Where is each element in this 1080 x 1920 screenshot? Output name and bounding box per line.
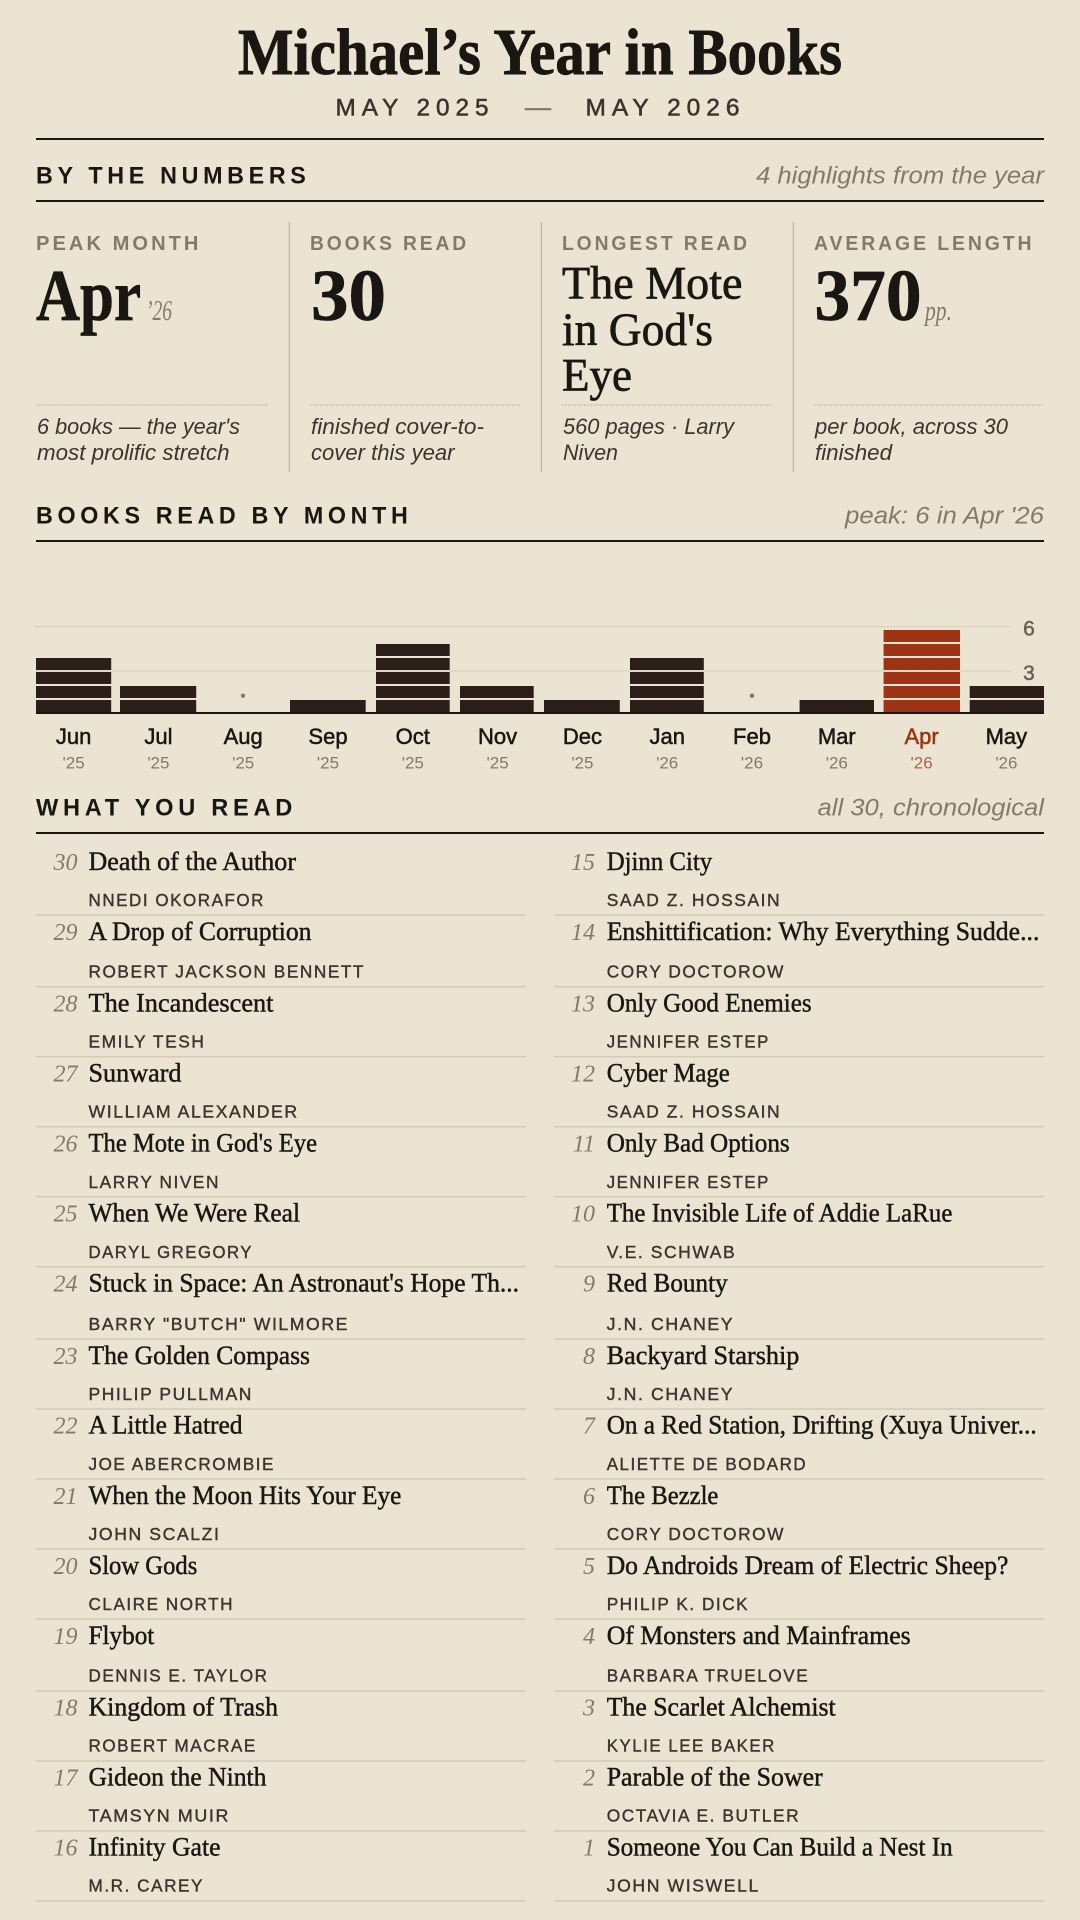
book 15: 15	[571, 850, 595, 876]
panel: longest read: The Mote	[562, 257, 742, 309]
panel: longest read	[562, 232, 772, 465]
book 13: JENNIFER ESTEP	[607, 1032, 770, 1052]
panel: longest read: Eye	[562, 350, 632, 402]
book 26: The Mote in God's Eye	[88, 1129, 317, 1158]
panel: longest read: 560 pages · Larry	[563, 414, 736, 439]
book 26: LARRY NIVEN	[88, 1172, 220, 1192]
book 25: DARYL GREGORY	[88, 1242, 253, 1262]
book 14: Enshittification: Why Everything Sudde...	[607, 917, 1039, 946]
subtitle: date range: —	[525, 95, 552, 122]
book 17: 17	[54, 1766, 78, 1792]
section heading: books read by month: BOOKS READ BY MONTH	[36, 502, 412, 529]
bar chart: books by month: Mar	[818, 724, 856, 749]
bar chart: books by month: Jul	[144, 724, 172, 749]
book 11: JENNIFER ESTEP	[607, 1172, 770, 1192]
book 27: 27	[54, 1062, 78, 1088]
title: Michael’s Year in Books	[238, 16, 842, 89]
panel: peak month: most prolific stretch	[37, 440, 230, 465]
panel: peak month: ’26	[146, 296, 172, 327]
book 2: OCTAVIA E. BUTLER	[607, 1806, 800, 1826]
section heading: what you read	[36, 795, 1045, 822]
book 24: BARRY "BUTCH" WILMORE	[88, 1314, 349, 1334]
book 19: 19	[54, 1624, 78, 1650]
book 29: ROBERT JACKSON BENNETT	[88, 962, 365, 982]
book 6: The Bezzle	[607, 1481, 718, 1510]
panel: average length: pp.	[923, 296, 952, 327]
book 7: 7	[583, 1413, 596, 1439]
book 28: EMILY TESH	[88, 1032, 206, 1052]
book 6	[554, 1481, 1044, 1550]
book 2	[554, 1763, 1044, 1832]
panel: books read: cover this year	[311, 440, 456, 465]
book 28: The Incandescent	[88, 989, 274, 1018]
subtitle: date range	[336, 95, 746, 122]
book 2: 2	[583, 1766, 595, 1792]
section heading: books read by month	[36, 502, 1045, 529]
book 16: 16	[54, 1836, 78, 1862]
book 4	[554, 1621, 1044, 1692]
book 12: Cyber Mage	[607, 1059, 730, 1088]
book 5	[554, 1551, 1044, 1620]
bar chart: books by month: May	[986, 724, 1027, 749]
book 26: 26	[54, 1132, 78, 1158]
book 3: KYLIE LEE BAKER	[607, 1736, 776, 1756]
book 20: CLAIRE NORTH	[88, 1594, 234, 1614]
book 27: WILLIAM ALEXANDER	[88, 1102, 299, 1122]
book 14: CORY DOCTOROW	[607, 962, 785, 982]
bar chart: books by month: '26	[656, 753, 678, 772]
book 8: J.N. CHANEY	[607, 1384, 734, 1404]
book 26	[36, 1129, 526, 1198]
book 12	[554, 1059, 1044, 1128]
book 5: PHILIP K. DICK	[607, 1594, 749, 1614]
book 29	[36, 917, 526, 988]
book 25: When We Were Real	[88, 1199, 300, 1228]
panel: longest read: in God's	[562, 304, 713, 356]
book 27: Sunward	[88, 1059, 182, 1088]
book 14	[554, 917, 1044, 988]
book 22: A Little Hatred	[88, 1410, 242, 1439]
bar chart: books by month: '25	[571, 753, 593, 772]
bar chart: books by month: '25	[487, 753, 509, 772]
book 16: Infinity Gate	[88, 1833, 220, 1862]
bar chart: books by month: 6	[1023, 617, 1035, 640]
book 24	[36, 1269, 526, 1340]
book 17: TAMSYN MUIR	[88, 1806, 230, 1826]
book 7: ALIETTE DE BODARD	[607, 1454, 807, 1474]
book 17	[36, 1763, 526, 1832]
book 19: DENNIS E. TAYLOR	[88, 1666, 268, 1686]
book 25: 25	[54, 1202, 78, 1228]
book 30: Death of the Author	[88, 847, 296, 876]
section heading: what you read: all 30, chronological	[818, 795, 1045, 822]
panel: average length: per book, across 30	[814, 414, 1009, 439]
book 14: 14	[571, 920, 595, 946]
panel: peak month: Apr	[36, 255, 141, 336]
book 16: M.R. CAREY	[88, 1876, 204, 1896]
bar chart: books by month: '25	[232, 753, 254, 772]
book 28: 28	[54, 992, 78, 1018]
panel: average length: 370	[814, 255, 922, 336]
book 7	[554, 1410, 1044, 1480]
bar chart: books by month: Aug	[224, 724, 263, 749]
bar chart: books by month: '25	[402, 753, 424, 772]
book list: left column	[36, 847, 526, 1902]
panel: books read	[310, 232, 520, 465]
bar chart: books by month: '26	[741, 753, 763, 772]
book 11: 11	[573, 1132, 595, 1158]
book 20: 20	[54, 1554, 78, 1580]
book 29: 29	[54, 920, 78, 946]
panel: longest read: Niven	[563, 440, 618, 465]
book 1: 1	[583, 1836, 595, 1862]
book 18: Kingdom of Trash	[88, 1693, 278, 1722]
book 13: 13	[571, 992, 595, 1018]
book 12: 12	[571, 1062, 595, 1088]
book 30: 30	[52, 850, 78, 876]
book 5: Do Androids Dream of Electric Sheep?	[607, 1551, 1008, 1580]
panel: average length	[814, 232, 1044, 465]
panel: books read: 30	[311, 255, 386, 336]
panel: average length: AVERAGE LENGTH	[814, 232, 1034, 255]
book 15: Djinn City	[607, 847, 712, 876]
section heading: books read by month: peak: 6 in Apr '26	[844, 502, 1045, 529]
book 13	[554, 989, 1044, 1058]
bar chart: books by month: '25	[317, 753, 339, 772]
book 28	[36, 989, 526, 1058]
book 1	[554, 1833, 1044, 1902]
book 18	[36, 1693, 526, 1762]
book 11	[554, 1129, 1044, 1198]
bar chart: books by month: Jan	[649, 724, 685, 749]
book 3	[554, 1693, 1044, 1762]
bar chart: books by month: '26	[995, 753, 1017, 772]
book 15	[554, 847, 1044, 916]
book 2: Parable of the Sower	[607, 1763, 823, 1792]
book 8	[554, 1341, 1044, 1410]
book 4: 4	[583, 1624, 595, 1650]
book 24: Stuck in Space: An Astronaut's Hope Th...	[88, 1269, 519, 1298]
bar chart: books by month: Sep	[308, 724, 348, 749]
book 9: J.N. CHANEY	[607, 1314, 734, 1334]
book 27	[36, 1059, 526, 1128]
book 15: SAAD Z. HOSSAIN	[607, 890, 781, 910]
subtitle: date range: MAY 2026	[586, 95, 746, 122]
book 30: NNEDI OKORAFOR	[88, 890, 265, 910]
panel: peak month: PEAK MONTH	[36, 232, 202, 255]
panel: books read: finished cover-to-	[311, 414, 484, 439]
book 3: The Scarlet Alchemist	[607, 1693, 836, 1722]
book 23: PHILIP PULLMAN	[88, 1384, 253, 1404]
book 22: JOE ABERCROMBIE	[88, 1454, 275, 1474]
subtitle: date range: MAY 2025	[336, 95, 494, 122]
book 18: ROBERT MACRAE	[88, 1736, 257, 1756]
book 7: On a Red Station, Drifting (Xuya Univer...	[607, 1410, 1037, 1439]
book 4: Of Monsters and Mainframes	[607, 1621, 911, 1650]
book 30	[36, 847, 526, 916]
book 19	[36, 1621, 526, 1692]
book 16	[36, 1833, 526, 1902]
book 9: 9	[583, 1272, 595, 1298]
panel: peak month	[36, 232, 268, 465]
book 1: Someone You Can Build a Nest In	[607, 1833, 953, 1862]
bar chart: books by month: Jun	[56, 724, 91, 749]
book 21	[36, 1481, 526, 1550]
book 9: Red Bounty	[607, 1269, 728, 1298]
book 8: 8	[583, 1344, 595, 1370]
panel: books read: BOOKS READ	[310, 232, 469, 255]
book 6: 6	[583, 1484, 595, 1510]
bar chart: books by month: Nov	[478, 724, 517, 749]
book 23: The Golden Compass	[88, 1341, 310, 1370]
section heading: what you read: WHAT YOU READ	[36, 795, 297, 822]
bar chart: books by month: Dec	[563, 724, 602, 749]
book 22: 22	[54, 1413, 78, 1439]
book 3: 3	[582, 1696, 595, 1722]
book 24: 24	[54, 1272, 78, 1298]
book 18: 18	[54, 1696, 78, 1722]
bar chart: books by month: '25	[63, 753, 85, 772]
book 9	[554, 1269, 1044, 1340]
section heading: by the numbers	[36, 163, 1045, 190]
book 12: SAAD Z. HOSSAIN	[607, 1102, 781, 1122]
book 23	[36, 1341, 526, 1410]
book 22	[36, 1410, 526, 1480]
book 10: V.E. SCHWAB	[607, 1242, 736, 1262]
section heading: by the numbers: 4 highlights from the year	[756, 163, 1045, 190]
panel: average length: finished	[815, 440, 893, 465]
bar chart: books by month	[36, 617, 1044, 772]
book 10: The Invisible Life of Addie LaRue	[607, 1199, 952, 1228]
book 4: BARBARA TRUELOVE	[607, 1666, 809, 1686]
book 17: Gideon the Ninth	[88, 1763, 266, 1792]
book 21: When the Moon Hits Your Eye	[88, 1481, 401, 1510]
book 25	[36, 1199, 526, 1268]
bar chart: books by month: '26	[826, 753, 848, 772]
bar chart: books by month: '25	[147, 753, 169, 772]
book 20	[36, 1551, 526, 1620]
book 20: Slow Gods	[88, 1551, 197, 1580]
book 21: JOHN SCALZI	[88, 1524, 220, 1544]
book 1: JOHN WISWELL	[607, 1876, 760, 1896]
book 8: Backyard Starship	[607, 1341, 799, 1370]
book 23: 23	[54, 1344, 78, 1370]
book 6: CORY DOCTOROW	[607, 1524, 785, 1544]
book 19: Flybot	[88, 1621, 155, 1650]
panel: peak month: 6 books — the year's	[37, 414, 240, 439]
bar chart: books by month: Oct	[396, 724, 430, 749]
section heading: by the numbers: BY THE NUMBERS	[36, 163, 310, 190]
book 11: Only Bad Options	[607, 1129, 790, 1158]
book list: right column	[554, 847, 1044, 1902]
bar chart: books by month: '26	[911, 753, 933, 772]
bar chart: books by month: Apr	[904, 724, 939, 749]
book 21: 21	[54, 1484, 78, 1510]
book 13: Only Good Enemies	[607, 989, 812, 1018]
bar chart: books by month: Feb	[733, 724, 771, 749]
bar chart: books by month: 3	[1023, 662, 1035, 685]
book 5: 5	[583, 1554, 595, 1580]
book 10: 10	[571, 1202, 595, 1228]
book 10	[554, 1199, 1044, 1268]
book 29: A Drop of Corruption	[88, 917, 312, 946]
panel: longest read: LONGEST READ	[562, 232, 750, 255]
